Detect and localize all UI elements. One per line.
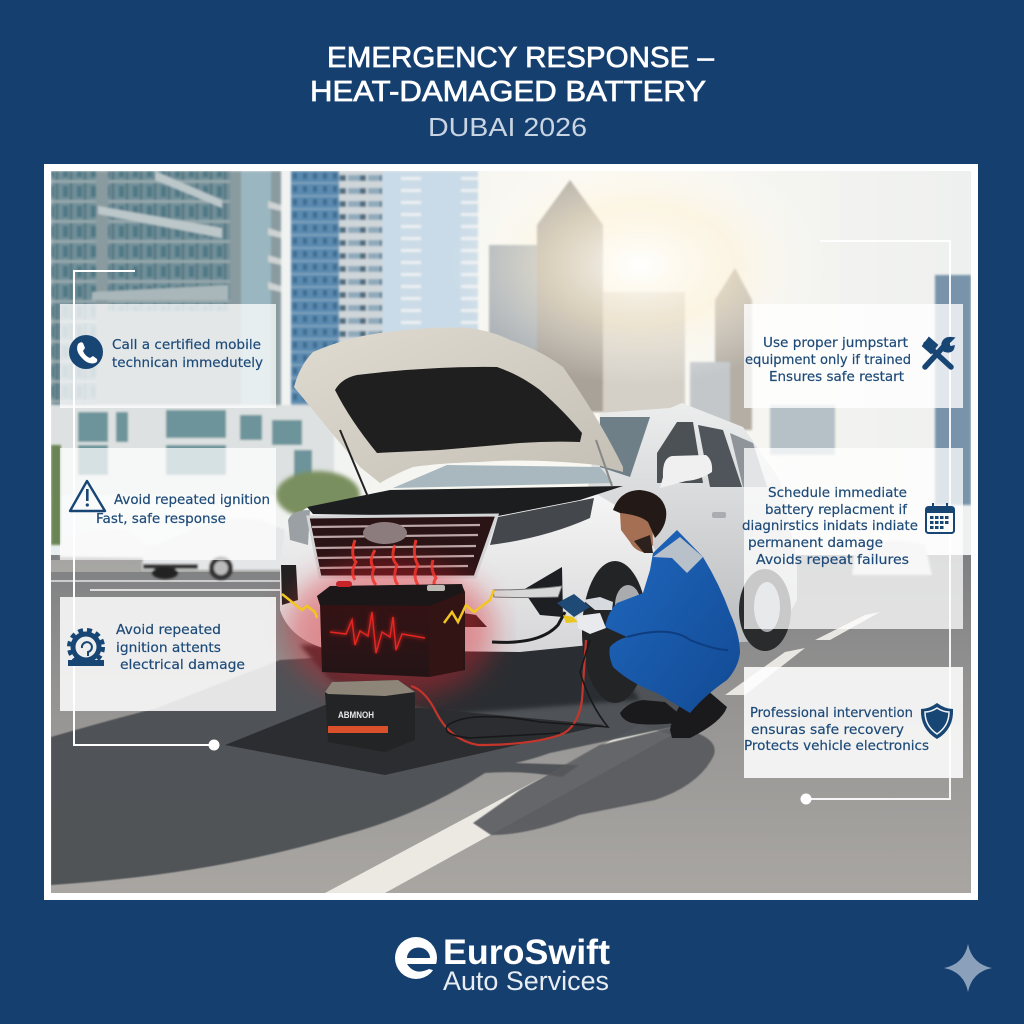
title: HEAT-DAMAGED BATTERY [310,76,706,108]
icon: warning triangle [70,481,105,511]
headlight right [490,498,594,545]
cables [411,612,608,745]
battery red glow [285,560,495,700]
text: schedule: Schedule immediate [768,486,907,501]
technician shadow [473,727,715,835]
open hood [294,328,623,483]
windshield strip [393,465,613,488]
diagnostic tool [557,594,590,623]
text: schedule: Avoids repeat failures [756,553,909,568]
grille heat waves [353,540,436,588]
skyline buildings [51,171,971,505]
sky [51,171,971,591]
logo: Auto Services [443,966,609,996]
text: electrical damage: Avoid repeated [116,623,221,638]
text: avoid ignition: Avoid repeated ignition [114,493,270,508]
road stripes [325,725,672,893]
yellow sparks [282,590,494,623]
text: professional: Protects vehicle electronics [744,739,929,754]
heat-damaged battery [317,581,465,677]
text: electrical damage: electrical damage [120,658,245,673]
text: professional: Professional intervention [750,706,913,721]
icon: calendar [926,503,954,533]
title [310,42,715,142]
title: EMERGENCY RESPONSE – [327,42,715,74]
distant cars [59,527,932,582]
logo [395,933,610,996]
small replacement battery [325,680,415,752]
text: professional: ensuras safe recovery [751,723,904,738]
lower bumper grille and fog light [523,567,563,617]
logo: EuroSwift [443,933,610,972]
tower blue [291,171,341,431]
icon: shield [921,703,953,739]
panel: avoid ignition [60,448,276,560]
headlight left [288,510,310,545]
text: schedule: diagnirstics inidats indiate [742,519,918,534]
car side body [588,403,797,642]
text: schedule: battery replacment if [765,503,907,518]
text: jumpstart: Ensures safe restart [769,370,904,385]
scene photo: car and technician [51,145,971,893]
tower pale glass [381,171,462,332]
right connector line [800,241,950,804]
road [51,555,971,893]
icon: tools [923,338,954,367]
technician [577,490,740,738]
left connector line [74,271,220,750]
under-car dark [300,640,640,715]
car windows [600,417,650,477]
icon: phone [69,335,103,369]
text: electrical damage [116,623,245,673]
icon: gear [68,630,104,666]
text: jumpstart [745,336,911,385]
sparkle star [944,944,992,992]
text: electrical damage: ignition attents [116,641,221,656]
small replacement battery: ABMNOH [338,710,374,721]
text: schedule [742,486,918,568]
lower podium building [51,405,334,495]
sun glow [488,181,753,372]
text: avoid ignition: Fast, safe response [96,512,226,527]
panel: electrical damage [60,597,276,711]
side mirror [660,455,712,488]
rear wheel [739,569,791,651]
panel: jumpstart equipment [744,304,963,408]
icon: logo e [395,937,440,979]
text: call technician: Call a certified mobile [112,338,261,353]
panel: call technician [60,304,276,408]
left building [94,171,282,406]
front wheel [582,561,648,703]
photo frame [44,164,978,900]
car and foreground shadow [51,640,690,885]
text: professional [744,706,929,754]
engine bay [307,486,623,517]
text: call technician [112,338,263,371]
panel: schedule replacement [742,448,963,629]
black mat [225,705,605,775]
grille [308,515,497,577]
panel: professional intervention [744,667,963,778]
text: call technician: technican immedutely [112,356,263,371]
text: jumpstart: equipment only if trained [745,353,911,368]
text: schedule: permanent damage [748,536,883,551]
door handle [712,512,726,518]
text: avoid ignition [96,493,270,527]
trees [276,471,360,519]
title: DUBAI 2026 [428,112,587,142]
text: jumpstart: Use proper jumpstart [763,336,908,351]
car front body [280,490,660,652]
